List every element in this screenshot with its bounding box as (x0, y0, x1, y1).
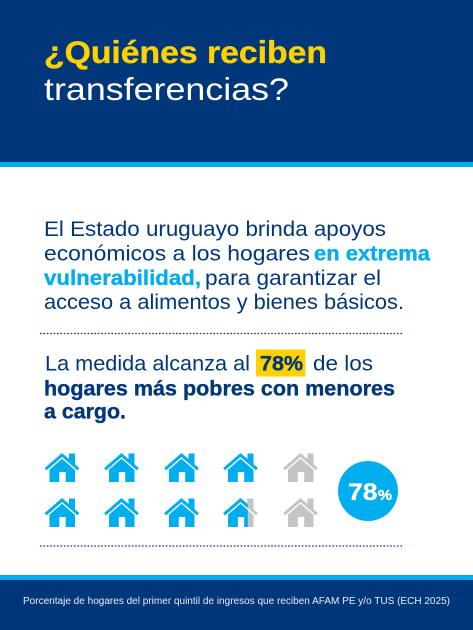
icon: house filled (45, 453, 79, 482)
icon: house filled (104, 453, 139, 482)
intro text: acceso a alimentos y bienes básicos. (44, 291, 404, 314)
highlight: 78%: 78% (260, 352, 303, 376)
intro text (44, 218, 430, 314)
icon: house filled (104, 498, 139, 527)
highlight statement: de los (313, 352, 373, 376)
title (44, 34, 327, 107)
badge: 78% (338, 461, 398, 521)
title: transferencias? (44, 71, 289, 107)
intro text: en extrema (314, 242, 430, 266)
icon: house filled (164, 498, 199, 527)
icon: house grey (283, 453, 318, 482)
pictogram: houses (45, 453, 318, 527)
footer source note: Porcentaje de hogares del primer quintil de ingresos que reciben AFAM PE y/o TUS (ECH 2025) (23, 596, 450, 607)
icon: house filled (223, 453, 258, 482)
header panel (0, 0, 473, 167)
icon: house filled (164, 453, 199, 482)
icon: house partially filled (223, 498, 258, 527)
highlight statement: La medida alcanza al (45, 352, 250, 376)
badge: 78%: 78 (348, 479, 378, 506)
highlight statement: hogares más pobres con menores (44, 378, 395, 400)
intro text: económicos a los hogares (44, 242, 310, 266)
intro text: El Estado uruguayo brinda apoyos (44, 218, 386, 241)
highlight statement: a cargo. (44, 400, 126, 424)
icon: house grey (283, 498, 318, 527)
intro text: vulnerabilidad, (44, 267, 201, 290)
title: ¿Quiénes reciben (44, 34, 327, 70)
footer panel (0, 575, 473, 630)
highlight statement (44, 350, 395, 424)
badge: 78%: % (378, 487, 392, 504)
icon: house filled (45, 498, 79, 527)
intro text: para garantizar el (205, 267, 381, 290)
